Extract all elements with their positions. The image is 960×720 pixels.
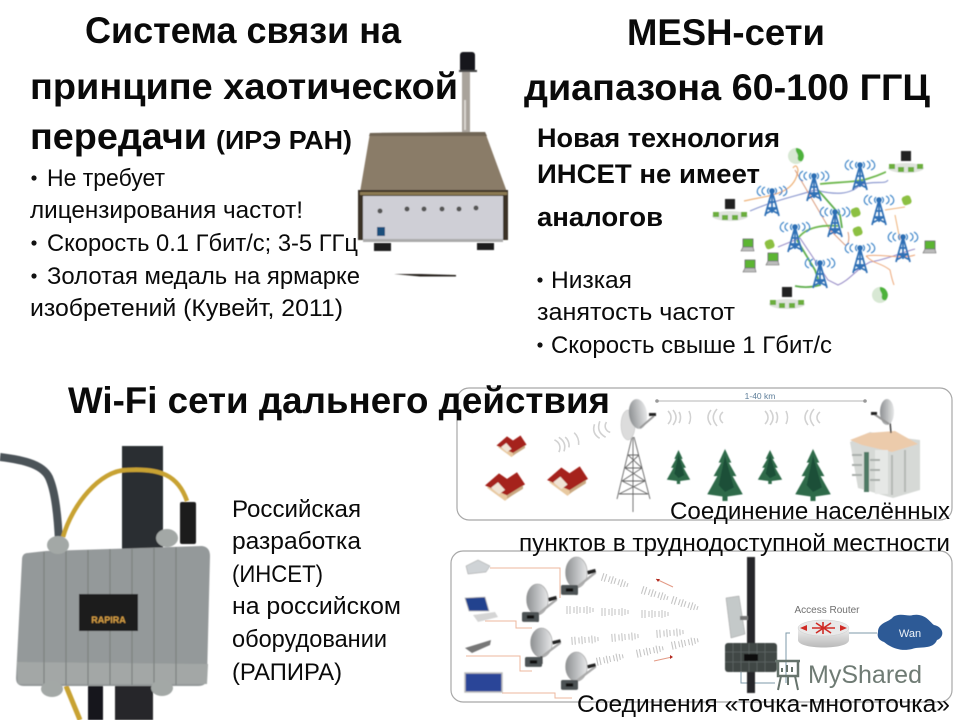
text block: Russian development: разработка: [232, 528, 362, 555]
text block: Russian development: (ИНСЕТ): [232, 561, 323, 588]
heading: MESH networks: [524, 12, 930, 108]
heading: MESH networks: диапазона 60-100 ГГЦ: [524, 67, 930, 108]
text block: Russian development: (РАПИРА): [232, 659, 342, 686]
text block: chaotic system bullets: [30, 165, 360, 322]
icon: base station on pole: [725, 557, 777, 693]
icon: lattice tower with dish: [617, 398, 656, 512]
text block: INSET technology: аналогов: [537, 202, 663, 232]
panel: chaotic transmission heading: [30, 10, 458, 157]
icon: apartment building with dish: [850, 399, 920, 498]
text block: Russian development: [232, 496, 401, 686]
text block: chaotic system bullets: Не требует: [47, 165, 165, 192]
icon: chaotic transceiver device with antenna and pen: [358, 52, 508, 276]
icon: WAN cloud: Wan: [899, 628, 921, 640]
panel: point-to-multipoint network: [451, 551, 952, 702]
icon: WAN cloud: [878, 615, 942, 650]
text block: chaotic system bullets: изобретений (Кувейт, 2011): [30, 295, 343, 322]
photo: RAPIRA outdoor unit on pole: [0, 446, 210, 720]
radio waves: [554, 409, 820, 454]
text block: INSET technology: Новая технология: [537, 123, 780, 153]
chart: mesh network diagram: [712, 148, 936, 309]
text block: chaotic system bullets: Золотая медаль на ярмарке: [47, 263, 360, 290]
text block: INSET technology: ИНСЕТ не имеет: [537, 159, 760, 189]
text block: Russian development: оборудовании: [232, 626, 387, 653]
client wiring: [466, 568, 877, 698]
caption: point to multipoint: Соединения «точка-многоточка»: [577, 691, 950, 718]
panel: chaotic transmission heading: Система связи на: [85, 10, 401, 51]
panel: point-to-point long range link: [457, 388, 952, 520]
watermark: MyShared logo: MyShared: [808, 661, 922, 689]
photo: RAPIRA outdoor unit on pole: RAPIRA: [91, 615, 126, 625]
panel: chaotic transmission heading: передачи: [30, 116, 207, 157]
distance line with label: [655, 391, 867, 403]
text block: Russian development: на российском: [232, 593, 401, 620]
text block: mesh bullets: [537, 267, 832, 359]
icon: access router: [794, 605, 860, 648]
text block: mesh bullets: занятость частот: [537, 299, 735, 326]
distance line with label: 1-40 km: [745, 391, 775, 401]
icon: client devices: [465, 560, 502, 692]
text block: INSET technology: [537, 123, 780, 232]
text block: mesh bullets: Низкая: [551, 267, 632, 294]
icon: houses: [485, 436, 588, 501]
caption: settlements connection: пунктов в труднодоступной местности: [519, 530, 950, 557]
caption: settlements connection: Соединение населённых: [670, 498, 950, 525]
icon: access router: Access Router: [794, 605, 860, 616]
panel: chaotic transmission heading: принципе хаотической: [30, 66, 458, 107]
text block: chaotic system bullets: лицензирования частот!: [30, 197, 303, 224]
icon: subscriber dishes: [522, 557, 596, 690]
text block: chaotic system bullets: Скорость 0.1 Гбит/с; 3-5 ГГц: [47, 230, 358, 257]
text block: mesh bullets: Скорость свыше 1 Гбит/с: [551, 332, 832, 359]
caption: settlements connection: [519, 498, 950, 557]
heading: MESH networks: MESH-сети: [627, 12, 825, 53]
text block: Russian development: Российская: [232, 496, 361, 523]
radio beams: [567, 573, 699, 666]
heading: Wi-Fi long range: Wi-Fi сети дальнего действия: [68, 380, 610, 421]
panel: chaotic transmission heading: (ИРЭ РАН): [216, 125, 352, 155]
icon: fir trees: [667, 449, 831, 501]
